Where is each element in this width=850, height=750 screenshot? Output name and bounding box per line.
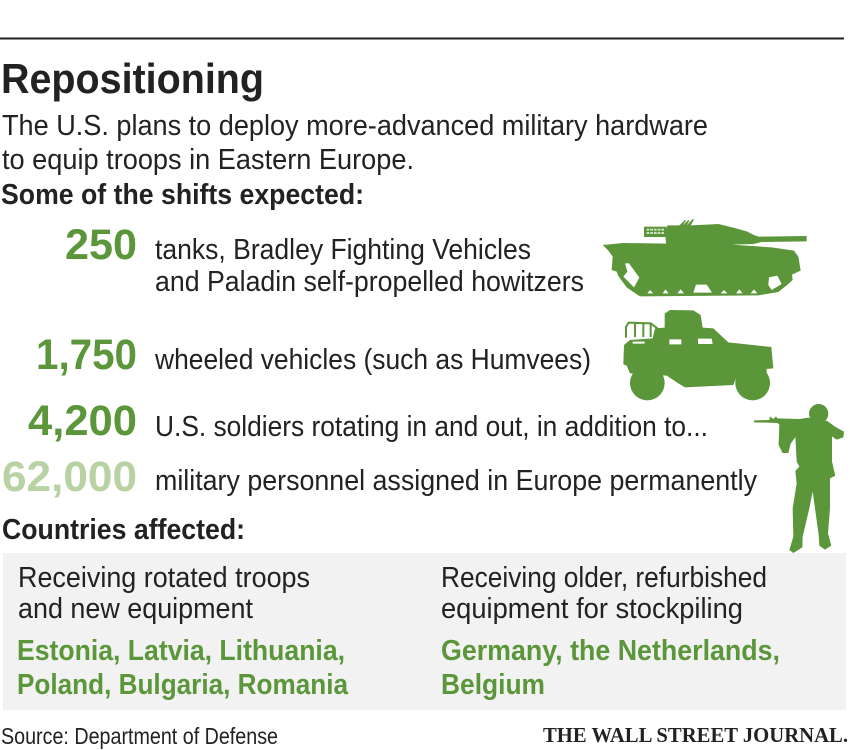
icon: soldier: [754, 404, 844, 553]
column: older equipment: equipment for stockpiling: [441, 593, 743, 625]
stat: 4,200 soldiers rotating: [28, 397, 708, 445]
subtitle: [2, 110, 708, 176]
stat: 4,200 soldiers rotating: 4,200: [28, 397, 137, 445]
column: older equipment: Receiving older, refurbished: [441, 562, 767, 594]
column: older equipment: Belgium: [441, 669, 545, 701]
stat: 62,000 personnel: military personnel assigned in Europe permanently: [155, 465, 757, 497]
column: rotated troops: Receiving rotated troops: [18, 562, 310, 594]
icon: tank: [603, 219, 807, 296]
column: rotated troops: Estonia, Latvia, Lithuania,: [17, 635, 345, 667]
column: older equipment: Germany, the Netherlands,: [441, 635, 780, 667]
column: older equipment: [441, 562, 780, 701]
stat: 4,200 soldiers rotating: U.S. soldiers rotating in and out, in addition to...: [155, 411, 708, 443]
stat: 1,750 wheeled vehicles: 1,750: [36, 331, 137, 379]
icon: humvee: [623, 310, 773, 400]
subtitle: to equip troops in Eastern Europe.: [2, 144, 414, 176]
subtitle: The U.S. plans to deploy more-advanced military hardware: [2, 110, 708, 142]
stat: 250 tanks: 250: [65, 221, 137, 269]
credit: THE WALL STREET JOURNAL.: [543, 723, 848, 747]
heading: shifts expected: Some of the shifts expected:: [1, 179, 364, 211]
panel: countries: [3, 553, 846, 710]
source note: Source: Department of Defense: [1, 723, 278, 749]
title: Repositioning: [1, 55, 264, 102]
stat: 1,750 wheeled vehicles: wheeled vehicles (such as Humvees): [154, 344, 591, 376]
stat: 62,000 personnel: [2, 453, 757, 501]
column: rotated troops: [17, 562, 349, 701]
stat: 62,000 personnel: 62,000: [2, 453, 137, 501]
stat: 1,750 wheeled vehicles: [36, 331, 591, 379]
stat: 250 tanks: and Paladin self-propelled howitzers: [155, 266, 584, 298]
stat: 250 tanks: [65, 221, 584, 298]
column: rotated troops: Poland, Bulgaria, Romania: [17, 669, 349, 701]
heading: countries affected: Countries affected:: [2, 514, 245, 546]
column: rotated troops: and new equipment: [18, 593, 253, 625]
stat: 250 tanks: tanks, Bradley Fighting Vehicles: [155, 234, 531, 266]
